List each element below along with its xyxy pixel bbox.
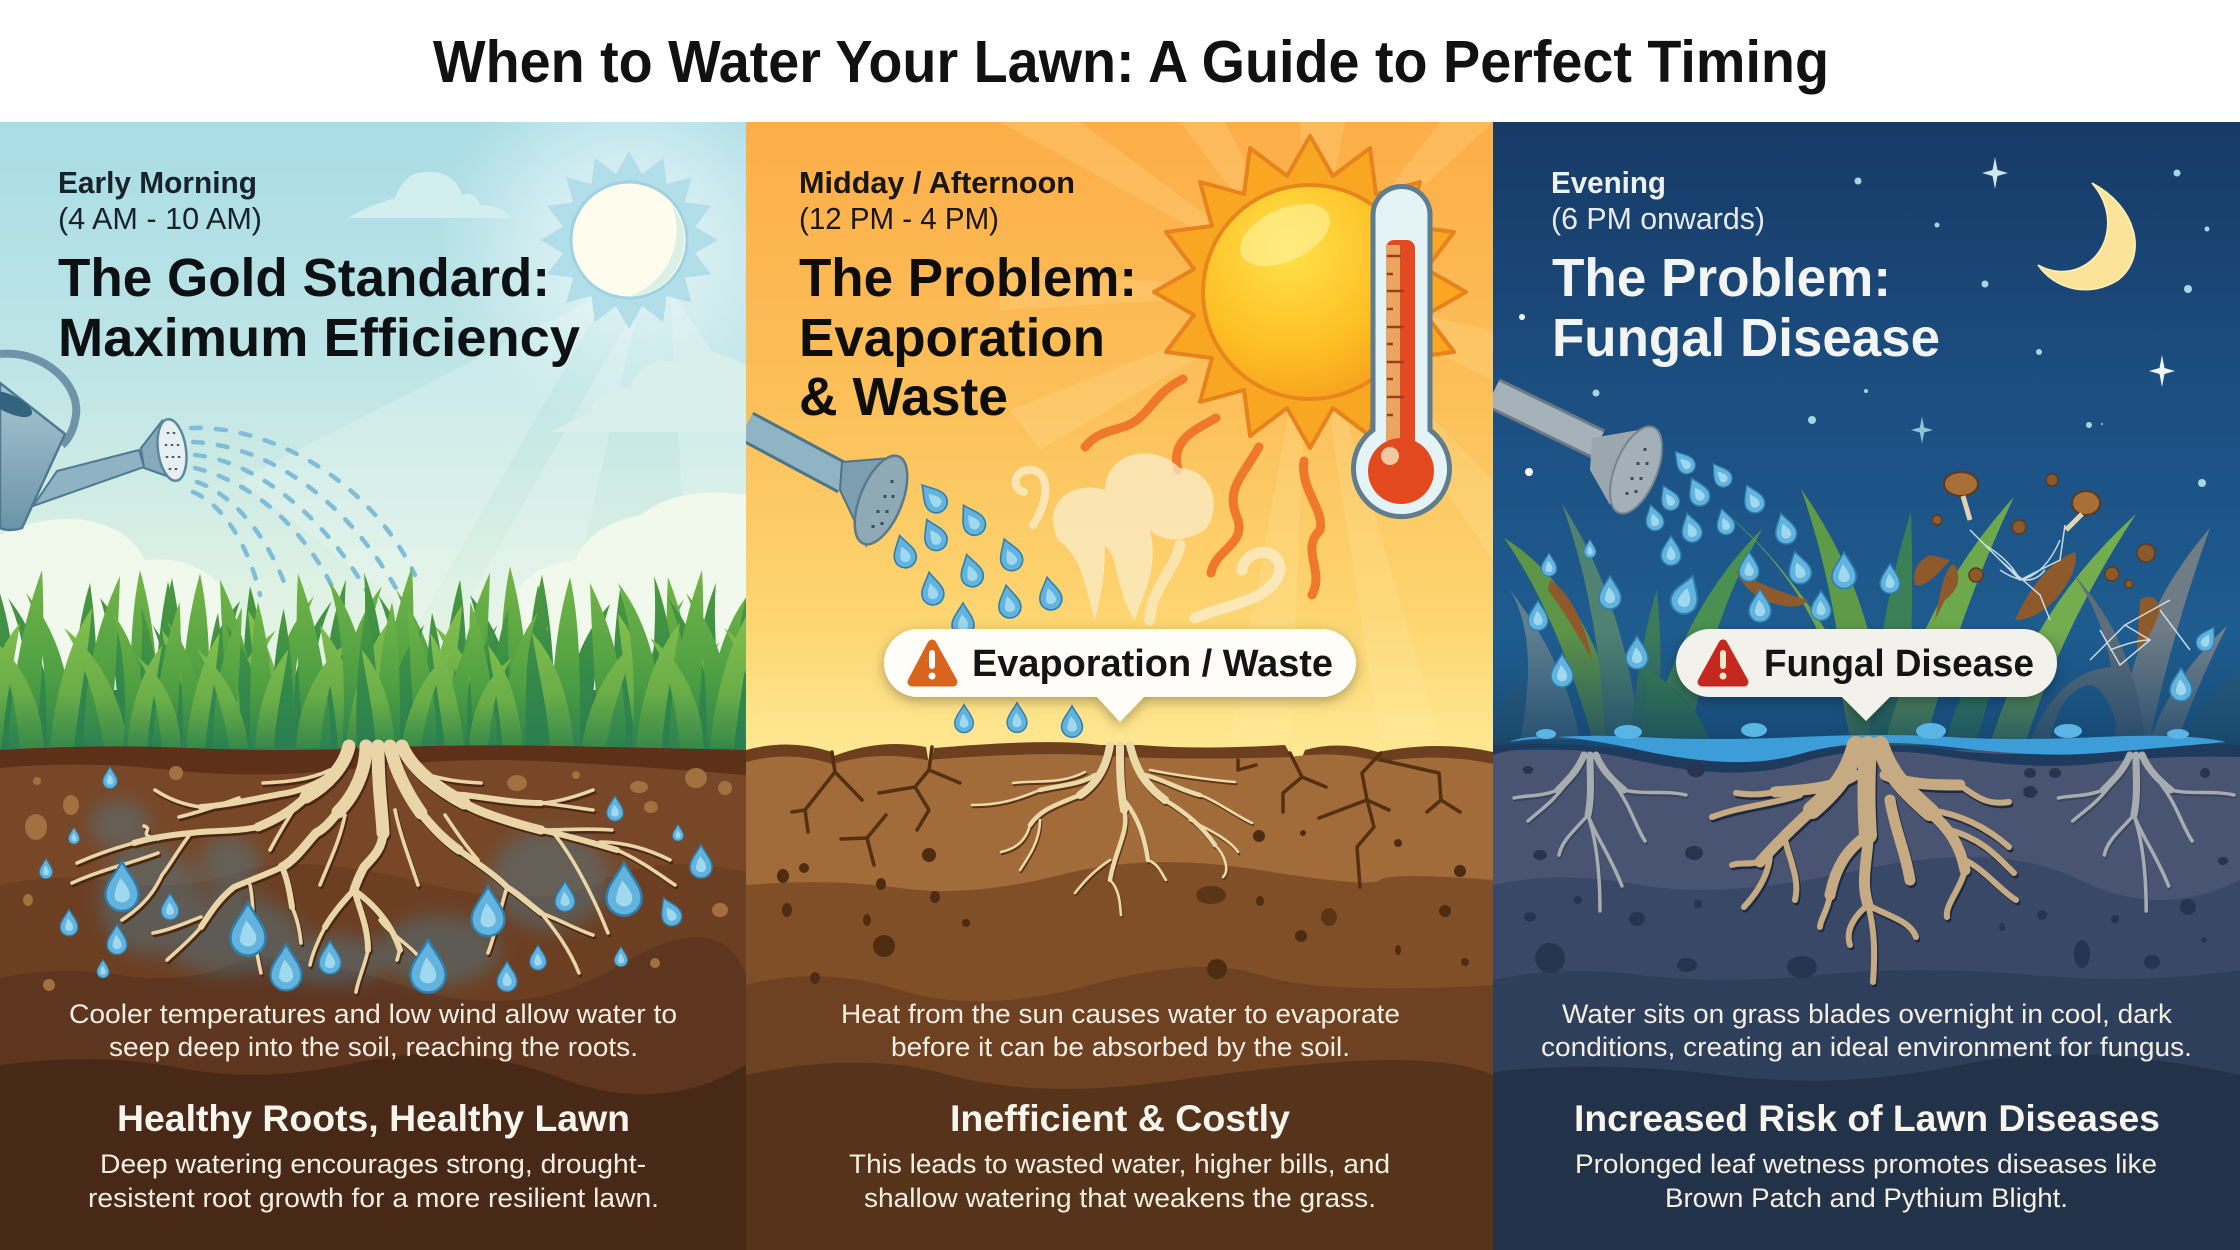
icon: thermometer [1354,186,1450,517]
icon: watering can rose [1493,393,1673,521]
grass [0,566,845,750]
benefit text: resistent root growth for a more resilient lawn. [88,1183,659,1213]
disease text [1575,1149,2157,1213]
subheading: Inefficient & Costly [950,1098,1290,1139]
time label: (4 AM - 10 AM) [58,201,262,236]
icon: blazing sun [1154,136,1466,448]
heading: Evaporation [799,308,1105,368]
steam cloud [1016,453,1280,620]
heading [1552,248,1940,368]
explanation text: Heat from the sun causes water to evaporate [841,999,1400,1029]
heading [58,248,580,368]
explanation text [69,999,677,1062]
soil layers [0,745,746,1250]
heading: The Problem: [799,248,1137,308]
heading: The Problem: [1552,248,1891,308]
midday sky [746,122,1493,802]
title: When to Water Your Lawn: A Guide to Perfect Timing [433,29,1829,95]
icon: warning [912,644,953,682]
panel: early morning [0,122,746,1250]
shallow root system [972,745,1253,917]
soil layers [1493,750,2240,1250]
callout: evaporation: Evaporation / Waste [972,643,1333,685]
icon: sun [540,151,718,329]
spider webs [1970,525,2190,665]
water spray [191,428,415,595]
explanation text: Water sits on grass blades overnight in cool, dark [1562,999,2173,1029]
disease text: Brown Patch and Pythium Blight. [1665,1183,2068,1213]
callout: fungal disease [1676,629,2057,721]
explanation text: seep deep into the soil, reaching the roots. [109,1032,638,1062]
subheading: Healthy Roots, Healthy Lawn [117,1098,630,1139]
explanation text [1541,999,2192,1062]
explanation text [841,999,1400,1062]
callout: fungal disease: Fungal Disease [1764,643,2034,685]
explanation text: Cooler temperatures and low wind allow water to [69,999,677,1029]
benefit text [88,1149,659,1213]
icon: warning [1702,644,1744,682]
clouds [0,172,746,700]
night sky [1493,122,2240,802]
callout: evaporation [884,629,1356,722]
time label [1551,165,1765,236]
water droplets [1528,446,2221,701]
consequence text: This leads to wasted water, higher bills, and [849,1149,1390,1179]
heading: The Gold Standard: [58,248,550,308]
water seepage in soil [90,800,610,985]
time label [60,171,260,236]
time label: Midday / Afternoon [799,165,1075,200]
time label: (6 PM onwards) [1551,201,1765,236]
soil pebbles [1523,763,2228,978]
sunlight glow and rays [240,122,746,510]
moon and stars [1519,157,2210,487]
heading: & Waste [799,367,1008,427]
panel: midday [746,122,1493,1250]
time label: Early Morning [58,165,257,200]
soil cracks [792,747,1460,887]
subheading: Increased Risk of Lawn Diseases [1574,1098,2160,1139]
soil pebbles [777,830,1469,984]
consequence text [849,1149,1390,1213]
explanation text: conditions, creating an ideal environment for fungus. [1541,1032,2192,1062]
sun beams [1000,122,1493,740]
heading: Maximum Efficiency [58,308,580,368]
water pooling on surface [1493,723,2240,773]
icon: watering can [0,354,190,530]
time label [800,171,1074,236]
diseased grass [1493,489,2240,750]
fungal patches and mushrooms [1548,472,2160,660]
soil layers [746,742,1493,1250]
consequence text: shallow watering that weakens the grass. [864,1183,1376,1213]
time label: Evening [1551,165,1666,200]
panel: evening [1493,122,2240,1250]
soil pebbles [23,766,732,991]
time label: (12 PM - 4 PM) [799,201,999,236]
falling water drops [889,478,1082,737]
explanation text: before it can be absorbed by the soil. [891,1032,1350,1062]
root system [72,746,676,994]
heading [800,257,1132,416]
disease text: Prolonged leaf wetness promotes diseases like [1575,1149,2157,1179]
root systems [1514,745,2235,984]
heat waves [1085,379,1321,595]
water drops in soil [39,767,712,993]
morning sky [0,122,746,673]
benefit text: Deep watering encourages strong, drought- [100,1149,646,1179]
heading: Fungal Disease [1552,308,1940,368]
icon: watering can rose [746,426,918,551]
